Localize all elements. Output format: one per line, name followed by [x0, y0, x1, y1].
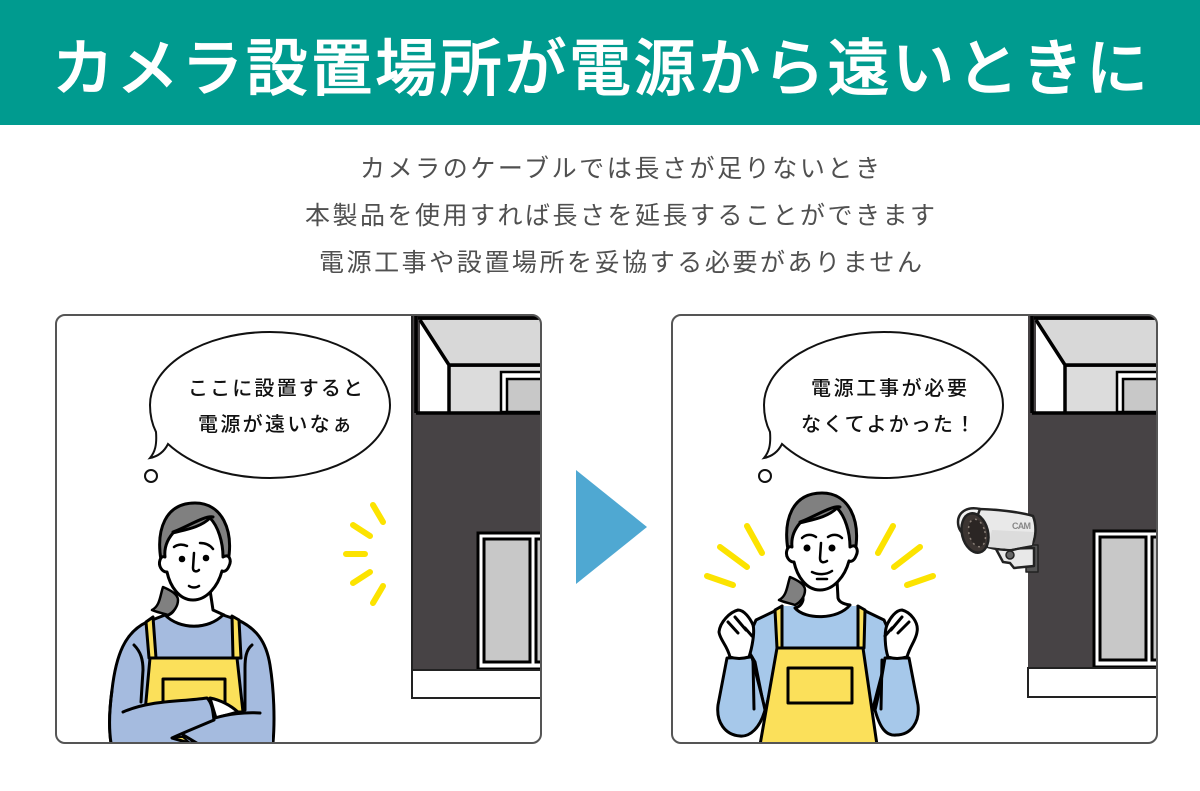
house with camera wall	[1027, 316, 1156, 698]
arrow	[576, 470, 647, 584]
speech bubble	[145, 332, 390, 482]
speech bubble: 電源が遠いなぁ	[198, 413, 352, 436]
panel: after	[672, 315, 1172, 745]
woman cheering	[718, 493, 918, 745]
title banner: カメラ設置場所が電源から遠いときに	[52, 35, 1148, 104]
yellow emphasis marks	[346, 505, 383, 603]
security camera: CAM	[1012, 521, 1031, 531]
speech bubble: なくてよかった！	[801, 414, 975, 436]
speech bubble: 電源工事が必要	[811, 377, 967, 400]
intro text block: 本製品を使用すれば長さを延長することができます	[305, 202, 935, 230]
woman with arms crossed	[110, 503, 274, 745]
speech bubble	[759, 332, 1003, 482]
intro text block	[305, 155, 935, 277]
intro text block: 電源工事や設置場所を妥協する必要がありません	[319, 249, 922, 277]
panel: before	[56, 315, 556, 745]
speech bubble: ここに設置すると	[188, 378, 363, 400]
intro text block: カメラのケーブルでは長さが足りないとき	[360, 155, 880, 183]
security camera	[958, 508, 1038, 572]
house	[411, 316, 540, 699]
yellow cheer marks	[707, 526, 933, 585]
title banner	[0, 0, 1200, 125]
